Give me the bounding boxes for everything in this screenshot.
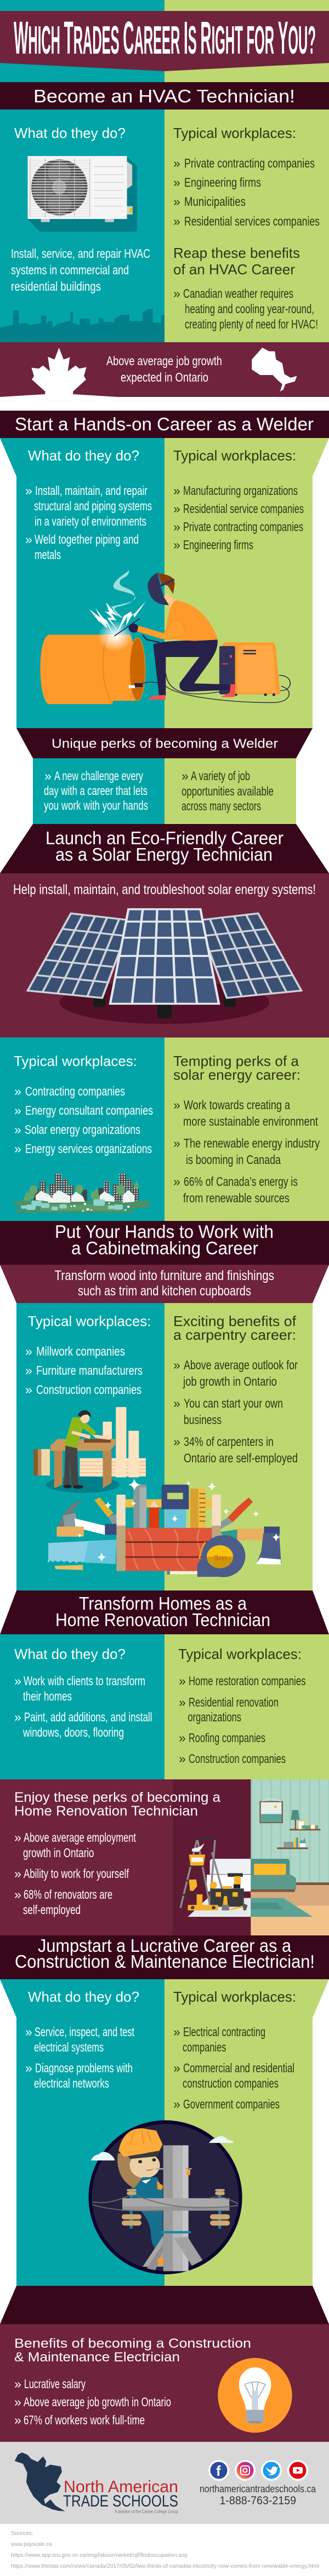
list: electrician benefits [14,2377,171,2427]
list: solar perks: Work towards creating a [184,1098,290,1112]
heading band: solar: as a Solar Energy Technician [55,844,273,865]
list: renovation duties: their homes [23,1689,72,1703]
list: solar workplaces: » [14,1084,21,1098]
list: welder duties: structural and piping systems [34,499,152,513]
heading: electrician benefits: Benefits of becoming a Construction [14,2336,251,2351]
panel: electrician benefits [0,2324,329,2442]
heading band: electrician: Construction & Maintenance Electrician! [15,1951,315,1972]
logo: North American Trade Schools: North American [64,2477,178,2496]
heading band: renovation [0,1590,329,1634]
heading: what do they do: What do they do? [14,1646,126,1662]
list: renovation workplaces: organizations [188,1710,241,1724]
heading: typical workplaces: Typical workplaces: [27,1313,151,1329]
list: electrician duties: » [25,2061,32,2075]
heading: what do they do: What do they do? [28,1989,139,2005]
footer panel [0,2442,329,2524]
list: carpentry workplaces: » [25,1363,32,1378]
list: welder workplaces: » [173,538,180,552]
text: perk two: across many sectors [181,799,261,813]
contact details: northamericantradeschools.ca [200,2483,316,2494]
heading: electrician benefits [14,2336,251,2365]
list: renovation workplaces [179,1674,306,1766]
panel: cabinetmaking columns [16,1303,313,1590]
list: solar workplaces [14,1084,153,1156]
decorative band: trapezoid before benefits [0,2286,329,2324]
list: solar workplaces: » [14,1142,21,1156]
list: electrician duties: electrical networks [34,2076,109,2090]
heading: renovation perks: Enjoy these perks of becoming a [14,1790,220,1805]
list: electrician duties: Diagnose problems with [35,2061,133,2075]
list: solar workplaces: » [14,1103,21,1117]
list: welder duties: metals [35,548,61,562]
list: HVAC benefits [173,286,318,331]
logo: North American Trade Schools: A division of the Career College Group [115,2509,178,2514]
list: carpentry benefits: 34% of carpenters in [184,1434,274,1449]
text: growth: Above average job growth [106,354,222,368]
list: renovation perks: » [14,1830,21,1845]
heading: typical workplaces: Typical workplaces: [173,447,296,464]
text: HVAC description [11,246,150,293]
panel: welder columns [0,438,329,728]
heading band: solar [0,824,329,873]
list: carpentry benefits: You can start your own [184,1396,283,1410]
social icons [208,2460,308,2481]
list: welder duties: in a variety of environments [35,514,146,528]
heading: carpentry benefits [173,1313,297,1343]
text: tape measure label: 3m [214,1553,227,1562]
sources: www.payscale.ca [10,2541,52,2548]
list: electrician workplaces: » [173,2097,180,2111]
panel: renovation perks [0,1779,329,1935]
heading: electrician benefits: & Maintenance Electrician [14,2350,180,2365]
heading band: renovation: Home Renovation Technician [55,1610,270,1630]
icon: air conditioning unit [27,156,137,232]
list: renovation workplaces: » [179,1751,186,1766]
list: carpentry benefits: Above average outlook for [184,1358,298,1372]
heading band: welder [0,411,329,438]
list: welder workplaces: Engineering firms [183,538,253,552]
list: HVAC benefits: » [173,286,180,301]
list: electrician benefits: » [14,2377,21,2391]
heading: solar perks [173,1053,300,1083]
list: electrician workplaces: companies [183,2040,226,2054]
heading band: welder perks [16,728,313,758]
list: carpentry workplaces: » [25,1344,32,1358]
text: perk two [181,769,274,813]
callout: job growth in Ontario [0,342,329,397]
contact details [200,2483,316,2507]
list: electrician workplaces [173,2025,294,2111]
list: carpentry benefits: business [184,1413,222,1427]
list: electrician benefits: Above average job growth in Ontario [24,2395,171,2409]
list: solar workplaces: Solar energy organizations [25,1122,140,1137]
list: welder workplaces [173,483,304,552]
text: growth [106,354,222,384]
text: perk one: day with a career that lets [44,783,148,798]
heading band: cabinetmaking: Put Your Hands to Work with [55,1221,274,1242]
icon: Instagram [235,2460,256,2481]
subheading: cabinetmaking description: Transform wood into furniture and finishings [55,1268,274,1283]
list: renovation workplaces: » [179,1731,186,1745]
heading band: HVAC: Become an HVAC Technician! [33,86,295,106]
text: HVAC description: residential buildings [11,279,101,293]
list: welder duties [25,483,152,562]
heading: what do they do: What do they do? [28,447,139,464]
list: renovation perks: Ability to work for yourself [24,1866,129,1881]
heading: typical workplaces: Typical workplaces: [173,125,296,141]
list: renovation workplaces: Residential renovation [189,1695,279,1709]
heading: what do they do: What do they do? [14,125,126,141]
heading: typical workplaces: Typical workplaces: [178,1646,302,1662]
list: renovation perks: Above average employment [24,1830,136,1845]
list: renovation duties: » [14,1674,21,1688]
sources [10,2530,319,2569]
list: electrician duties [25,2025,134,2090]
list: carpentry workplaces: Millwork companies [36,1344,125,1358]
icon: light bulb [218,2358,292,2433]
list: solar perks: is booming in Canada [186,1152,281,1167]
list: renovation duties: Paint, add additions, and install [24,1710,152,1724]
list: renovation perks: » [14,1866,21,1881]
heading band: cabinetmaking [0,1221,329,1265]
list: renovation workplaces: Roofing companies [189,1731,265,1745]
heading: renovation perks: Home Renovation Technician [14,1803,198,1819]
text: HVAC description: Install, service, and repair HVAC [11,246,150,261]
list: HVAC workplaces: Municipalities [184,194,246,209]
contact details: 1-888-763-2159 [219,2494,296,2507]
text: perk one: you work with your hands [44,798,148,812]
list: solar perks: » [173,1136,180,1150]
subheading: cabinetmaking description [0,1265,329,1303]
list: welder workplaces: » [173,502,180,516]
list: electrician benefits: Lucrative salary [24,2377,86,2391]
list: HVAC workplaces: » [173,156,180,170]
logo: North American Trade Schools: TRADE SCHOOLS [63,2492,178,2510]
panel: HVAC columns [0,110,329,342]
list: HVAC workplaces: » [173,175,180,189]
icon: Ontario map [252,348,297,391]
list: solar workplaces: Energy services organizations [25,1142,152,1156]
list: solar perks: » [173,1174,180,1189]
list: carpentry workplaces [25,1344,143,1397]
list: welder duties: » [25,483,32,498]
list: HVAC workplaces [173,156,320,228]
heading band: cabinetmaking: a Cabinetmaking Career [71,1238,258,1258]
list: electrician benefits: » [14,2413,21,2427]
list: renovation perks [14,1830,136,1917]
list: solar workplaces: Contracting companies [25,1084,125,1098]
list: electrician benefits: » [14,2395,21,2409]
panel: solar intro [0,873,329,1038]
panel: solar columns [0,1038,329,1221]
heading: HVAC benefits: Reap these benefits [173,245,300,261]
heading band: HVAC [0,82,329,110]
heading band: renovation: Transform Homes as a [79,1593,247,1613]
heading band: solar: Launch an Eco-Friendly Career [46,828,283,848]
list: electrician workplaces: construction companies [183,2076,279,2090]
list: HVAC workplaces: » [173,214,180,228]
text: HVAC description: systems in commercial and [11,263,129,277]
illustration: toolbox with tools [48,1478,281,1577]
list: renovation duties [14,1674,152,1739]
illustration: solar city [14,1174,151,1213]
text: perk two: » [181,769,189,783]
heading: typical workplaces: Typical workplaces: [173,1989,296,2005]
list: carpentry benefits: » [173,1434,180,1449]
list: electrician workplaces: Government companies [183,2097,280,2111]
icon: Twitter [261,2460,282,2481]
list: carpentry benefits: » [173,1358,180,1372]
list: HVAC workplaces: » [173,194,180,209]
list: welder duties: Weld together piping and [35,532,139,546]
icon: Facebook: f [216,2463,221,2479]
list: carpentry benefits: » [173,1396,180,1410]
list: renovation perks: growth in Ontario [23,1846,94,1860]
list: electrician duties: electrical systems [34,2040,104,2054]
logo: North American Trade Schools [15,2452,178,2514]
panel: electrician columns [0,1979,329,2286]
heading: solar perks: solar energy career: [173,1067,300,1083]
list: renovation workplaces: Construction companies [189,1751,286,1766]
list: welder workplaces: » [173,483,180,498]
list: solar perks: from renewable sources [183,1191,290,1205]
heading: HVAC benefits [173,245,300,278]
list: electrician benefits: 67% of workers work full-time [24,2413,145,2427]
list: renovation workplaces: » [179,1695,186,1709]
icon: North America map [15,2452,65,2511]
list: renovation perks: self-employed [23,1903,81,1917]
heading: renovation perks [14,1790,220,1819]
list: welder duties: Install, maintain, and repair [35,483,148,498]
list: electrician workplaces: » [173,2061,180,2075]
list: solar workplaces: » [14,1122,21,1137]
text: perk two: opportunities available [181,784,274,798]
list: renovation duties: windows, doors, flooring [22,1725,124,1739]
illustration: carpenter at workbench [33,1407,146,1493]
list: welder duties: » [25,532,32,546]
list: electrician workplaces: Electrical contracting [183,2025,265,2039]
list: carpentry workplaces: Furniture manufacturers [36,1363,143,1378]
heading band: electrician: Jumpstart a Lucrative Career as a [38,1935,292,1956]
sources: Sources: [11,2530,33,2537]
list: renovation duties: » [14,1710,21,1724]
icon: maple leaf [0,348,117,397]
list: solar workplaces: Energy consultant companies [25,1103,153,1117]
heading: solar perks: Tempting perks of a [173,1053,299,1069]
text: perk one: A new challenge every [54,769,143,783]
list: solar perks: » [173,1098,180,1112]
illustration: half-renovated room [180,1779,329,1935]
list: renovation duties: Work with clients to transform [24,1674,145,1688]
sources: https://www.app.tcu.gov.on.ca/eng/labourmarket/ojf/findoccupation.asp [11,2552,188,2558]
list: carpentry benefits: job growth in Ontario [183,1374,277,1388]
heading band: electrician [0,1935,329,1979]
title section background [0,0,329,82]
illustration: welder at work [40,570,290,704]
list: welder workplaces: » [173,520,180,534]
heading: carpentry benefits: Exciting benefits of [173,1313,297,1329]
list: renovation perks: » [14,1887,21,1901]
heading: carpentry benefits: a carpentry career: [173,1327,296,1343]
panel: renovation columns [0,1634,329,1779]
illustration: solar panels [28,909,302,1024]
list: electrician duties: » [25,2025,32,2039]
list: solar perks [173,1098,320,1205]
text: perk two: A variety of job [191,769,250,783]
list: carpentry workplaces: Construction companies [36,1382,141,1397]
title banner [0,11,329,71]
heading: HVAC benefits: of an HVAC Career [173,261,295,278]
sources: https://www.thestar.com/news/canada/2017/05/02/two-thirds-of-canadas-electricity-now-comes-from-renewable-energy.html [11,2563,319,2569]
list: carpentry benefits [173,1358,298,1465]
illustration: electrician on utility pole [88,2120,242,2274]
skyline [0,309,164,342]
icon: Facebook [208,2460,229,2481]
list: electrician workplaces: » [173,2025,180,2039]
text: growth: expected in Ontario [121,370,208,384]
list: electrician duties: Service, inspect, and test [35,2025,134,2039]
list: carpentry benefits: Ontario are self-employed [184,1451,298,1465]
list: renovation workplaces: » [179,1674,186,1688]
text: perk one: » [44,769,52,783]
icon: YouTube [287,2460,308,2481]
heading band: welder perks: Unique perks of becoming a Welder [52,736,278,751]
heading band: welder: Start a Hands-on Career as a Welder [15,414,314,434]
list: carpentry workplaces: » [25,1382,32,1397]
text: perk one [44,769,148,812]
list: renovation perks: 68% of renovators are [24,1887,112,1901]
heading: typical workplaces: Typical workplaces: [14,1053,137,1069]
subheading: cabinetmaking description: such as trim and kitchen cupboards [78,1283,251,1299]
panel: welder perks [33,758,296,824]
list: HVAC workplaces: Engineering firms [184,175,261,189]
